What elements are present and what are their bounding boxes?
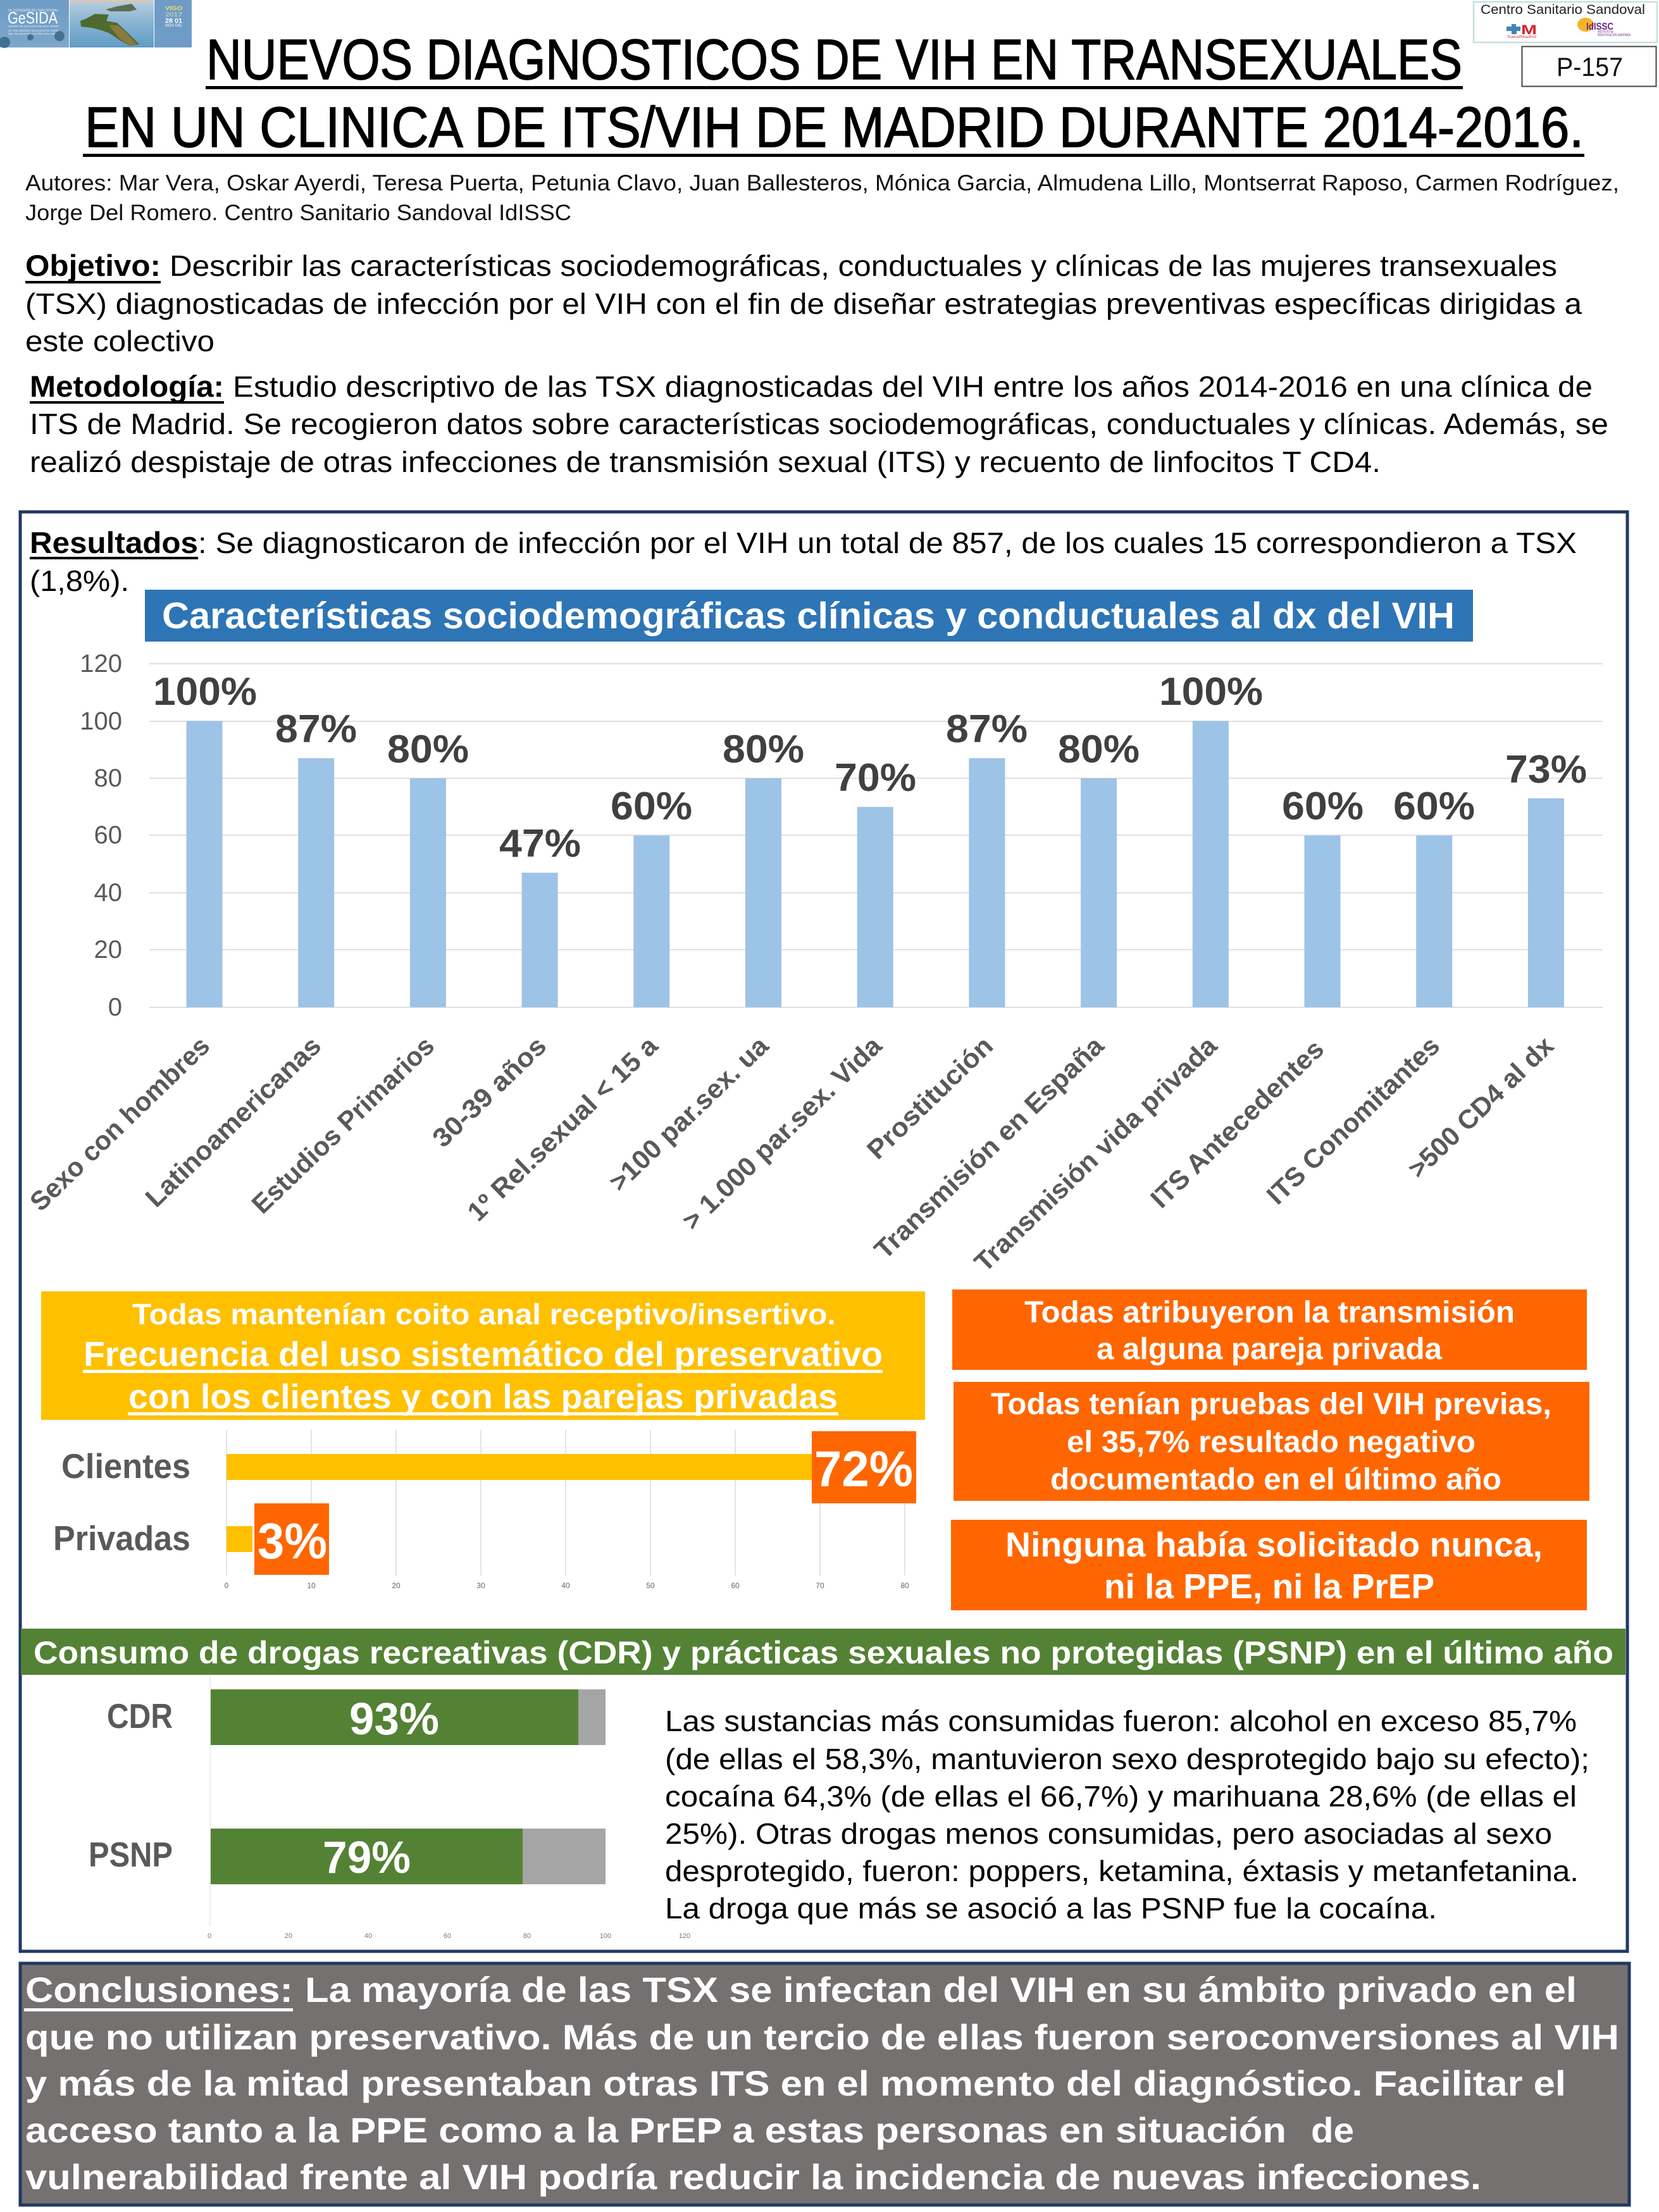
- bar chart: characteristics: >500 CD4 al dx: [1402, 1030, 1560, 1184]
- drug use heading: Consumo de drogas recreativas (CDR) y prácticas sexuales no protegidas (PSNP) en el último año: [34, 1635, 1613, 1670]
- poster number box: P-157: [1556, 52, 1623, 82]
- chart heading: Características sociodemográficas clínicas y conductuales al dx del VIH: [162, 595, 1455, 637]
- bar chart: drugs and unprotected sex: 0: [208, 1932, 211, 1940]
- results intro text: : Se diagnosticaron de infección por el VIH un total de 857, de los cuales 15 correspondieron a TSX: [198, 526, 1577, 559]
- logo: Centro Sanitario Sandoval: SaludMadrid: [1507, 35, 1536, 39]
- authors: Autores: Mar Vera, Oskar Ayerdi, Teresa Puerta, Petunia Clavo, Juan Ballesteros, Mónica Garcia, Almudena Lillo, Montserrat Raposo, Carmen Rodríguez,: [25, 171, 1619, 196]
- authors: [25, 171, 1619, 225]
- bar chart: characteristics: Estudios Primarios: [246, 1031, 440, 1219]
- logo: GeSIDA congress banner: [0, 0, 192, 48]
- bar chart: characteristics: 60%: [1282, 785, 1364, 828]
- logo: GeSIDA congress banner: XI REUNIÓN DOCENTE RED: [8, 28, 59, 32]
- panel: conclusions: de: [1311, 2110, 1354, 2150]
- panel: conclusions: La mayoría de las TSX se infectan del VIH en su ámbito privado en el: [305, 1970, 1577, 2010]
- title: NUEVOS DIAGNOSTICOS DE VIH EN TRANSEXUALES: [206, 28, 1462, 92]
- bar chart: drugs and unprotected sex: 80: [523, 1932, 531, 1940]
- logo: GeSIDA congress banner: IX CONGRESO NACIONAL: [8, 9, 59, 13]
- logo: GeSIDA congress banner: VIGO: [165, 5, 182, 11]
- results intro text: Resultados: [30, 526, 198, 559]
- bar chart: condom use: 50: [646, 1581, 655, 1590]
- callout: PPE and PrEP: Ninguna había solicitado nunca,: [1005, 1525, 1543, 1564]
- bar chart: condom use: 80: [900, 1581, 909, 1590]
- bar chart: drugs and unprotected sex: 100: [600, 1932, 611, 1940]
- logo: Centro Sanitario Sandoval: M: [1521, 23, 1537, 37]
- bar chart: characteristics: 60%: [611, 785, 692, 828]
- bar chart: characteristics: 1º Rel.sexual < 15 a: [461, 1030, 664, 1227]
- bar chart: characteristics: 100%: [1159, 670, 1263, 714]
- panel: conclusions: [20, 1963, 1629, 2205]
- logo: GeSIDA congress banner: DE INVESTIGACIÓN EN SIDA: [8, 32, 59, 35]
- substances text block: [665, 1705, 1589, 1925]
- bar chart: characteristics: 0: [108, 993, 122, 1021]
- bar chart: drugs and unprotected sex: 40: [364, 1932, 372, 1940]
- bar chart: characteristics: 87%: [275, 707, 357, 751]
- bar chart: drugs and unprotected sex: CDR: [107, 1696, 173, 1736]
- bar chart: characteristics: > 1.000 par.sex. Vida: [676, 1030, 888, 1236]
- panel: conclusions: que no utilizan preservativo. Más de un tercio de ellas fueron seroconversiones al VIH: [25, 2017, 1619, 2057]
- bar chart: condom use: 0: [225, 1581, 229, 1590]
- bar chart: condom use: 72%: [814, 1441, 913, 1497]
- callout: transmission: Todas atribuyeron la transmisión: [1024, 1296, 1515, 1329]
- bar chart: condom use: Clientes: [61, 1446, 190, 1486]
- substances text block: La droga que más se asoció a las PSNP fue la cocaína.: [665, 1892, 1437, 1925]
- bar chart: condom use: 10: [307, 1581, 316, 1590]
- bar chart: characteristics: 30-39 años: [426, 1031, 552, 1153]
- bar chart: drugs and unprotected sex: [89, 1677, 690, 1940]
- callout: transmission: [952, 1289, 1587, 1370]
- objective text: Describir las características sociodemográficas, conductuales y clínicas de las mujeres transexuales: [170, 249, 1557, 282]
- logo: GeSIDA congress banner: NOV DIC: [165, 24, 183, 28]
- bar chart: condom use: 60: [731, 1581, 740, 1590]
- callout: previous tests: documentado en el último año: [1050, 1463, 1501, 1496]
- panel: conclusions: y más de la mitad presentaban otras ITS en el momento del diagnóstico. Facilitar el: [25, 2063, 1566, 2103]
- panel: results: [20, 512, 1627, 1951]
- callout: condom use heading: con los clientes y con las parejas privadas: [128, 1377, 838, 1416]
- bar chart: characteristics: 80: [94, 764, 122, 792]
- bar chart: condom use: 20: [392, 1581, 401, 1590]
- bar chart: characteristics: 60: [94, 821, 122, 849]
- logo: Centro Sanitario Sandoval: INSTITUTO de: [1598, 30, 1613, 34]
- bar chart: characteristics: [24, 650, 1603, 1277]
- logo: GeSIDA congress banner: 2017: [165, 11, 182, 18]
- substances text block: desprotegido, fueron: poppers, ketamina, éxtasis y metanfetanina.: [665, 1855, 1579, 1887]
- callout: previous tests: [954, 1382, 1589, 1501]
- bar chart: characteristics: ITS Antecedentes: [1145, 1034, 1329, 1214]
- bar chart: characteristics: 80%: [387, 728, 469, 771]
- bar chart: condom use: 40: [561, 1581, 570, 1590]
- bar chart: characteristics: 20: [94, 936, 122, 964]
- callout: condom use heading: Frecuencia del uso sistemático del preservativo: [84, 1334, 883, 1374]
- bar chart: condom use: [53, 1430, 916, 1590]
- bar chart: drugs and unprotected sex: 93%: [349, 1694, 439, 1744]
- logo: GeSIDA congress banner: GRUPO DE ESTUDIO DE SIDA SEIMC: [8, 25, 59, 28]
- bar chart: characteristics: Transmisión en España: [868, 1030, 1110, 1265]
- methodology text: Metodología:: [30, 370, 224, 403]
- logo: Centro Sanitario Sandoval: Centro Sanitario Sandoval: [1481, 3, 1645, 17]
- bar chart: condom use: 30: [476, 1581, 485, 1590]
- results intro text: (1,8%).: [30, 564, 129, 597]
- logo: Centro Sanitario Sandoval: [1474, 2, 1657, 42]
- bar chart: characteristics: 80%: [1058, 728, 1140, 771]
- bar chart: characteristics: 73%: [1505, 748, 1587, 792]
- methodology text: Estudio descriptivo de las TSX diagnosticadas del VIH entre los años 2014-2016 en una clínica de: [233, 370, 1593, 403]
- callout: condom use heading: [41, 1291, 925, 1420]
- authors: Jorge Del Romero. Centro Sanitario Sandoval IdISSC: [25, 201, 571, 225]
- objective text: este colectivo: [25, 325, 214, 357]
- bar chart: characteristics: 70%: [835, 756, 916, 800]
- bar chart: characteristics: 87%: [946, 707, 1028, 751]
- callout: condom use heading: Todas mantenían coito anal receptivo/insertivo.: [132, 1298, 836, 1331]
- bar chart: drugs and unprotected sex: 120: [679, 1932, 690, 1940]
- bar chart: characteristics: 40: [94, 879, 122, 907]
- bar chart: characteristics: 47%: [499, 822, 581, 866]
- callout: PPE and PrEP: ni la PPE, ni la PrEP: [1104, 1567, 1434, 1606]
- methodology text: [30, 370, 1608, 478]
- methodology text: realizó despistaje de otras infecciones de transmisión sexual (ITS) y recuento de linfocitos T CD4.: [30, 445, 1381, 478]
- bar chart: characteristics: 100: [80, 707, 122, 735]
- panel: conclusions: Conclusiones:: [25, 1970, 293, 2010]
- bar chart: drugs and unprotected sex: 60: [444, 1932, 451, 1940]
- substances text block: (de ellas el 58,3%, mantuvieron sexo desprotegido bajo su efecto);: [665, 1743, 1589, 1775]
- panel: conclusions: vulnerabilidad frente al VIH podría reducir la incidencia de nuevas infecciones.: [25, 2157, 1481, 2197]
- bar chart: condom use: 3%: [258, 1513, 327, 1569]
- bar chart: characteristics: 60%: [1393, 785, 1475, 828]
- callout: previous tests: Todas tenían pruebas del VIH previas,: [991, 1388, 1551, 1421]
- substances text block: Las sustancias más consumidas fueron: alcohol en exceso 85,7%: [665, 1705, 1577, 1737]
- bar chart: drugs and unprotected sex: 20: [285, 1932, 292, 1940]
- title: [83, 28, 1584, 159]
- methodology text: ITS de Madrid. Se recogieron datos sobre características sociodemográficas, conductuales y clínicas. Además, se: [30, 407, 1608, 440]
- bar chart: condom use: 70: [816, 1581, 824, 1590]
- bar chart: characteristics: ITS Conomitantes: [1261, 1031, 1445, 1210]
- bar chart: characteristics: Sexo con hombres: [24, 1031, 215, 1217]
- bar chart: characteristics: 120: [80, 650, 122, 678]
- bar chart: characteristics: 100%: [153, 670, 257, 714]
- bar chart: characteristics: >100 par.sex. ua: [603, 1030, 774, 1197]
- panel: conclusions: acceso tanto a la PPE como a la PrEP a estas personas en situación: [25, 2110, 1286, 2150]
- logo: GeSIDA congress banner: 28 01: [165, 18, 182, 25]
- substances text block: cocaína 64,3% (de ellas el 66,7%) y marihuana 28,6% (de ellas el: [665, 1780, 1577, 1813]
- logo: Centro Sanitario Sandoval: IdISSC: [1586, 22, 1613, 32]
- objective text: Objetivo:: [25, 249, 161, 282]
- callout: previous tests: el 35,7% resultado negativo: [1067, 1426, 1476, 1459]
- callout: transmission: a alguna pareja privada: [1097, 1333, 1442, 1366]
- bar chart: condom use: Privadas: [53, 1519, 190, 1558]
- bar chart: characteristics: Latinoamericanas: [139, 1031, 326, 1213]
- bar chart: drugs and unprotected sex: PSNP: [89, 1835, 173, 1874]
- bar chart: characteristics: 80%: [723, 728, 804, 771]
- results intro text: [30, 526, 1577, 597]
- objective text: (TSX) diagnosticadas de infección por el VIH con el fin de diseñar estrategias preventivas específicas dirigidas a: [25, 287, 1582, 320]
- callout: PPE and PrEP: [951, 1520, 1587, 1610]
- logo: GeSIDA congress banner: GeSIDA: [8, 8, 58, 27]
- bar chart: characteristics: Transmisión vida privada: [969, 1030, 1223, 1277]
- bar chart: drugs and unprotected sex: 79%: [323, 1833, 411, 1883]
- bar chart: characteristics: Prostitución: [861, 1031, 998, 1165]
- logo: Centro Sanitario Sandoval: INVESTIGACIÓN SANITARIA: [1598, 33, 1631, 37]
- objective text: [25, 249, 1582, 357]
- poster number box: [1522, 47, 1656, 86]
- substances text block: 25%). Otras drogas menos consumidas, pero asociadas al sexo: [665, 1817, 1552, 1850]
